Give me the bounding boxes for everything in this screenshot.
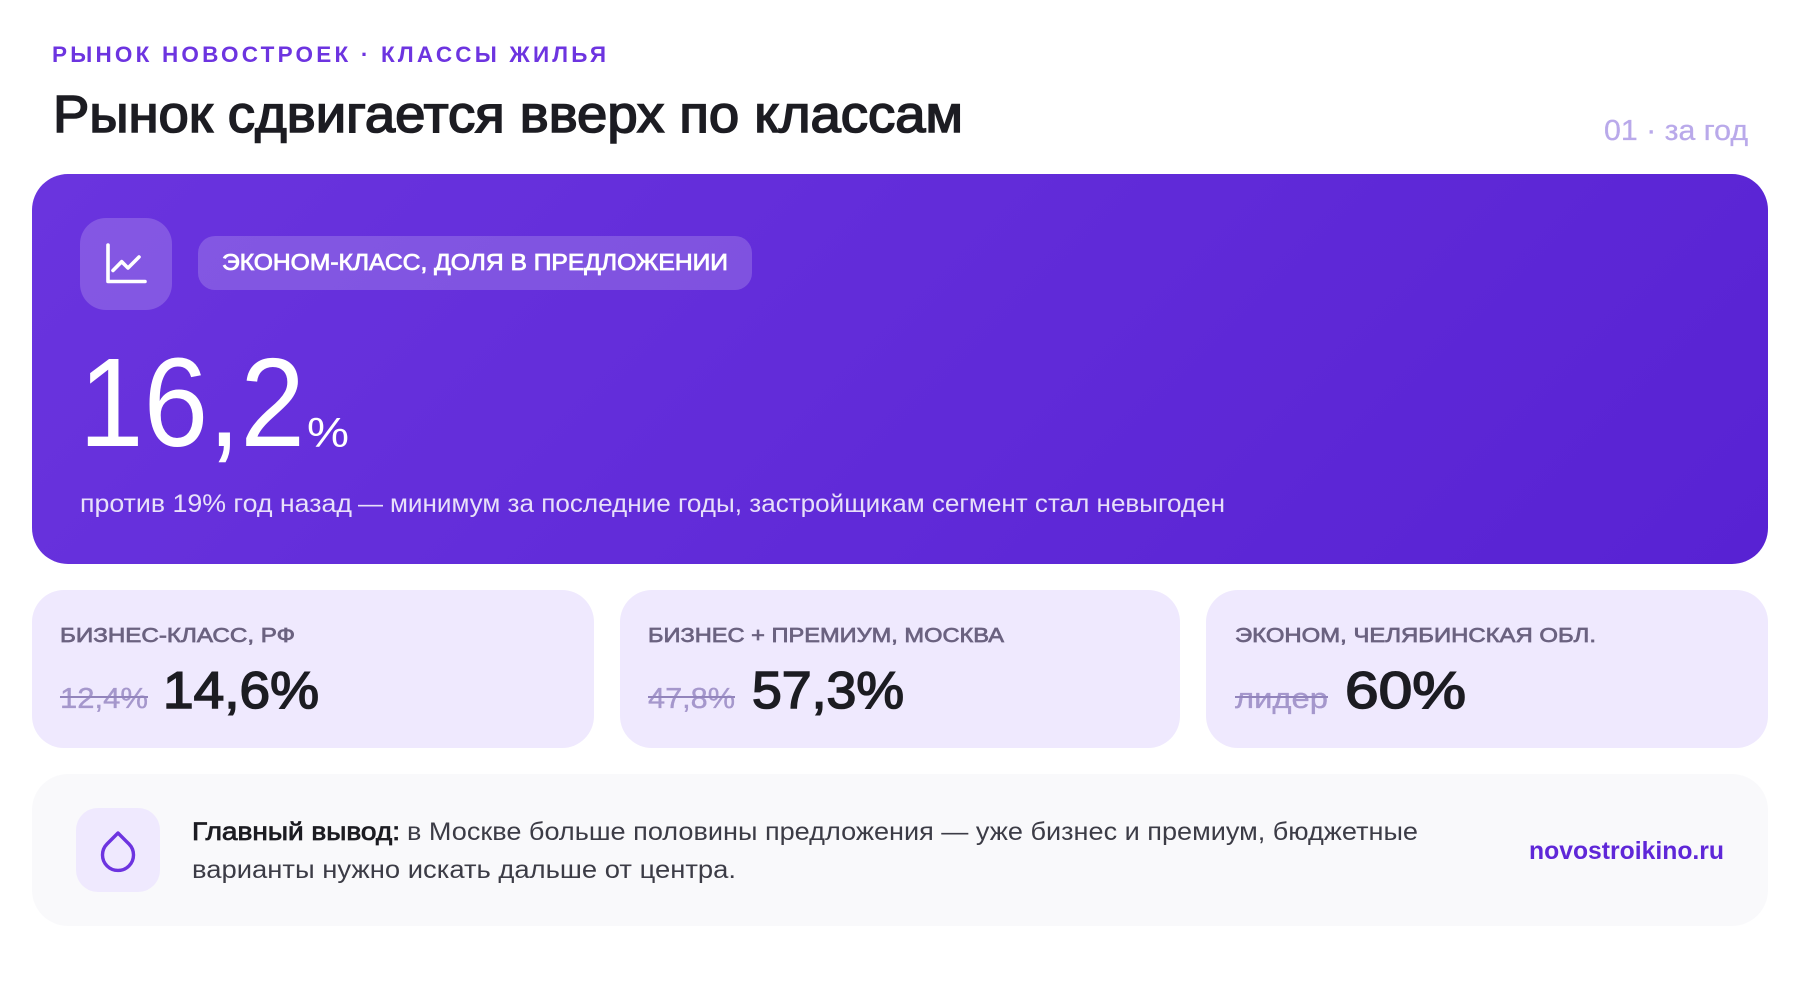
category chip: ЭКОНОМ-КЛАСС, ДОЛЯ В ПРЕДЛОЖЕНИИ bbox=[222, 249, 728, 275]
panel: hero economy class share bbox=[32, 174, 1768, 564]
category chip bbox=[198, 236, 752, 290]
panel: business class bbox=[32, 590, 594, 748]
card label: ЭКОНОМ, ЧЕЛЯБИНСКАЯ ОБЛ. bbox=[1235, 624, 1596, 647]
panel: business and premium Moscow bbox=[620, 590, 1180, 748]
eyebrow heading: РЫНОК НОВОСТРОЕК · КЛАССЫ ЖИЛЬЯ bbox=[52, 42, 606, 67]
card label: БИЗНЕС + ПРЕМИУМ, МОСКВА bbox=[648, 624, 1004, 647]
icon: drop bbox=[76, 808, 160, 892]
hero description bbox=[80, 490, 1225, 518]
takeaway text: варианты нужно искать дальше от центра. bbox=[192, 856, 736, 884]
hero description: минимум за последние годы, застройщикам сегмент стал невыгоден bbox=[390, 490, 1225, 518]
page marker: 01 · за год bbox=[1604, 115, 1748, 147]
big number: 16,2 bbox=[79, 332, 305, 473]
panel: main takeaway bbox=[32, 774, 1768, 926]
icon: line chart bbox=[80, 218, 172, 310]
current value: 57,3% bbox=[752, 662, 904, 720]
current value: 14,6% bbox=[163, 662, 319, 720]
big number: % bbox=[307, 409, 349, 456]
hero description: против 19% год назад bbox=[80, 490, 352, 518]
takeaway text: в Москве больше половины предложения — уже бизнес и премиум, бюджетные bbox=[407, 818, 1418, 846]
hero description: — bbox=[358, 490, 383, 518]
previous value: 12,4% bbox=[60, 683, 148, 715]
previous value: 47,8% bbox=[648, 683, 735, 715]
panel: economy Chelyabinsk bbox=[1206, 590, 1768, 748]
takeaway text bbox=[192, 818, 1418, 884]
previous value: лидер bbox=[1235, 683, 1328, 715]
source link: novostroikino.ru bbox=[1529, 837, 1724, 865]
current value: 60% bbox=[1345, 662, 1466, 720]
title: Рынок сдвигается вверх по классам bbox=[53, 86, 963, 144]
card label: БИЗНЕС-КЛАСС, РФ bbox=[60, 624, 295, 647]
takeaway text: Главный вывод: bbox=[192, 818, 400, 846]
